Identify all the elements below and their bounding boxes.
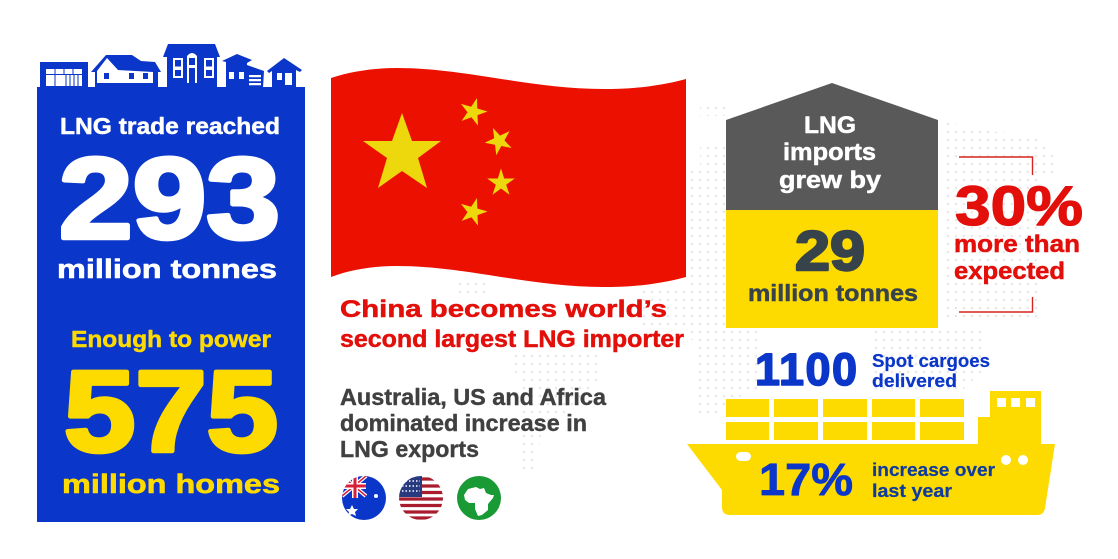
icon: small cottage: [267, 58, 302, 88]
number: 30%: 30%: [955, 174, 1083, 237]
icon: bungalow: [91, 55, 161, 88]
icon: US flag: [399, 476, 443, 520]
text: LNG imports grew by: LNG: [804, 112, 856, 139]
number: 293: 293: [59, 135, 280, 263]
text: Spot cargoes delivered: delivered: [872, 371, 957, 391]
text: million tonnes: million tonnes: [57, 254, 277, 284]
icon: tall townhouse: [163, 44, 220, 88]
panel: imports house: [726, 83, 938, 328]
text: more than expected: [954, 231, 1080, 285]
number: 1100: 1100: [755, 344, 857, 395]
text: LNG trade reached: LNG trade reached: [60, 113, 280, 139]
text: Spot cargoes delivered: Spot cargoes: [872, 351, 990, 371]
text: million tonnes: million tonnes: [748, 280, 918, 306]
text: exporters: Australia, US and Africa: [340, 384, 606, 410]
icon: China flag: [331, 68, 686, 287]
text: LNG imports grew by: [779, 112, 882, 194]
text: million homes: million homes: [62, 469, 280, 499]
flag cloth: [331, 68, 686, 287]
house body: [726, 210, 938, 328]
bracket bottom: [959, 297, 1032, 312]
icon: house with garage: [222, 54, 264, 88]
bracket top: [959, 157, 1032, 175]
heading: China second largest importer: China becomes world’s: [340, 296, 667, 323]
number: 17%: 17%: [759, 454, 853, 505]
ship containers: [726, 399, 964, 440]
number: 29: 29: [795, 219, 865, 282]
house roof: [726, 83, 938, 210]
text: Enough to power: Enough to power: [71, 326, 271, 352]
text: more than expected: expected: [954, 258, 1065, 285]
blue panel background: [37, 87, 305, 522]
text: exporters: dominated increase in: [340, 410, 587, 436]
ship hull and bridge: [687, 391, 1055, 515]
number: 575: 575: [64, 348, 278, 476]
text: exporters: [340, 384, 606, 462]
ship windows: [736, 398, 1035, 465]
text: increase over last year: increase over: [872, 460, 995, 480]
text: Spot cargoes delivered: [872, 351, 990, 391]
text: LNG imports grew by: grew by: [779, 167, 882, 194]
icon: apartment block: [40, 62, 88, 88]
icon: Africa: [457, 476, 501, 520]
panel: LNG trade and homes: [37, 44, 305, 522]
text: more than expected: more than: [954, 231, 1080, 258]
text: exporters: LNG exports: [340, 436, 479, 462]
heading: China second largest importer: [340, 296, 684, 353]
panel: ship: [687, 344, 1055, 515]
flag stars: [363, 94, 516, 227]
text: increase over last year: [872, 460, 995, 501]
background dotted world map: [457, 104, 1056, 473]
text: LNG imports grew by: imports: [783, 139, 876, 166]
heading: China second largest importer: second largest LNG importer: [340, 326, 684, 353]
icon: Australia flag: [342, 476, 386, 520]
icon: row of houses: [40, 44, 302, 88]
text: increase over last year: last year: [872, 481, 952, 501]
callout: 30% more than expected: [954, 157, 1083, 312]
infographic canvas: [37, 44, 1082, 522]
